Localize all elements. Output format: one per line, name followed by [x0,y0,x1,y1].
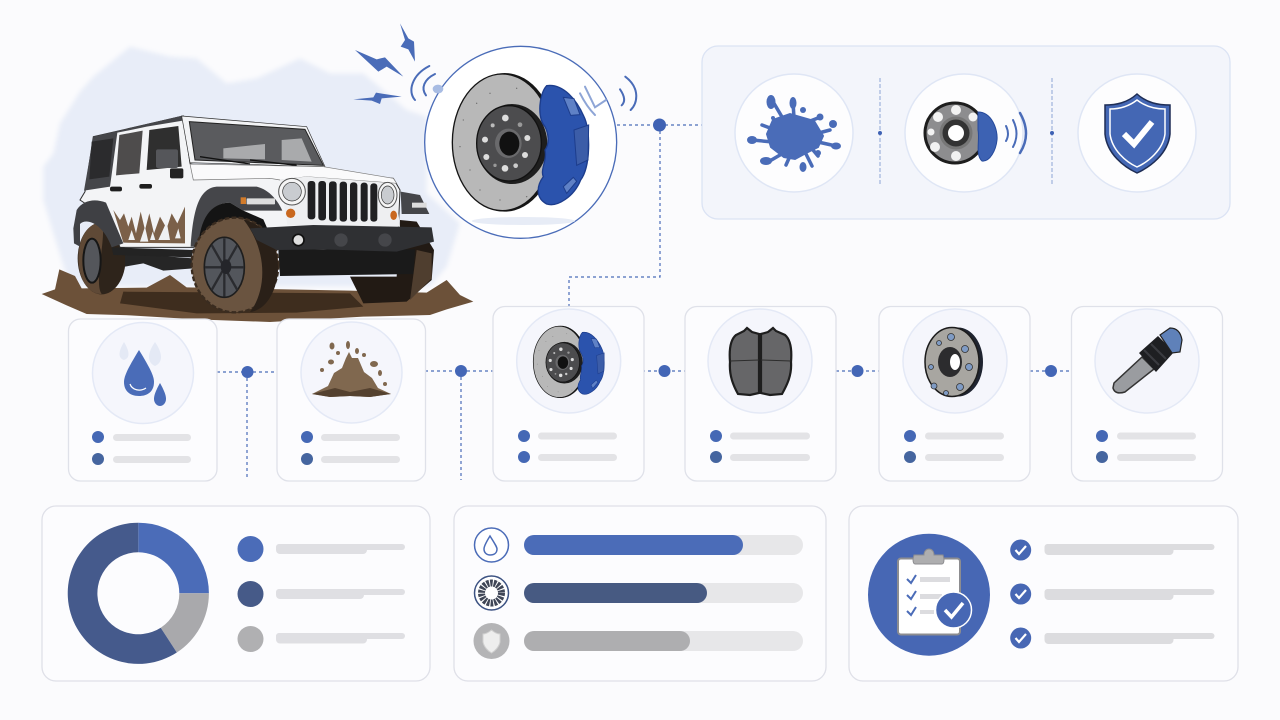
icon: protection shield [1078,74,1196,192]
bar values [524,535,743,651]
grille slats [308,181,377,222]
bullet rows [1096,430,1196,463]
card: hub [879,306,1030,481]
front wheel arch [191,187,282,247]
bullet rows [710,430,810,463]
icon: disc badge [474,576,508,610]
icon: mud splash [735,74,853,192]
icon: worn brake disc [905,74,1026,192]
right headlight [378,182,397,208]
front tyre [192,218,278,312]
quarter window [89,138,113,179]
check rows [1010,540,1214,648]
hood [190,164,397,183]
divider nodes [878,131,1054,135]
icon: brake pads [730,328,791,395]
windshield interior [223,138,312,162]
card: guide pin [1072,306,1222,481]
icon: small brake disc [533,326,604,398]
icon: clipboard badge [868,534,990,656]
panel: three conditions [702,46,1230,219]
far front tyre [350,220,434,303]
panel: progress bars [454,506,826,681]
wipers [200,157,297,165]
connector: component chain [217,371,1071,480]
windshield frame [182,116,325,167]
rear door window [116,131,143,175]
sound waves [411,66,636,115]
card: mud [277,319,426,481]
donut chart [68,523,209,664]
card: brake pads [685,306,836,481]
right marker [412,203,427,208]
front tyre tread [243,219,278,312]
front door window [147,126,182,170]
bullet rows [518,430,617,463]
rear tyre [78,222,126,294]
lower frame [125,253,193,271]
white lens circle [425,46,617,238]
panel background [702,46,1230,219]
panel: donut chart [42,506,430,681]
side step [112,247,193,257]
bullet rows [301,431,400,465]
brake disc and caliper [452,73,589,212]
icon: guide pin [1113,328,1182,393]
underbody [278,249,415,276]
mud ground shadow [120,292,363,313]
focus: brake disc with noise [353,23,636,238]
impact blob [433,85,443,93]
front rim [204,237,244,297]
icon: hub flange [925,328,983,396]
blue brush wash behind vehicle [43,47,460,287]
rim spokes [205,238,244,297]
icon: mud pile [312,341,391,397]
bullet rows [904,430,1004,463]
legend [238,536,405,652]
white streaks in mud [128,222,181,242]
left headlight [279,178,305,205]
rim hub [221,259,231,274]
connector nodes [242,365,1057,378]
card: water [68,319,217,481]
indicators [286,209,397,220]
right fender [401,192,429,214]
bar tracks [524,535,803,651]
mud ground [42,269,473,322]
dividers [880,78,1052,186]
wheel well [198,203,277,250]
bumper [250,225,434,252]
rear fender [73,200,123,247]
amber marker [241,197,246,204]
grille panel [280,177,400,227]
mud spray on doors [113,207,185,243]
door mirror [156,149,183,178]
connector: top route [569,125,702,306]
rear tyre mud [78,223,103,294]
icon: drop badge [474,528,508,562]
far tyre tread [410,250,432,300]
rear wheel rim [83,239,101,283]
panel: checklist [849,506,1238,681]
hard top [84,115,187,191]
windshield [189,122,323,165]
lightning bolts [353,23,415,104]
bullet rows [92,431,191,465]
side marker [247,198,275,204]
card: disc [493,306,644,481]
door handles [110,184,152,191]
disc shadow [472,217,575,225]
bumper lights [293,233,392,247]
icon: water drops [120,342,166,406]
icon: shield badge [474,623,510,659]
hero: muddy off-road vehicle [42,47,473,322]
vehicle body [80,116,400,247]
connector node [653,118,666,132]
